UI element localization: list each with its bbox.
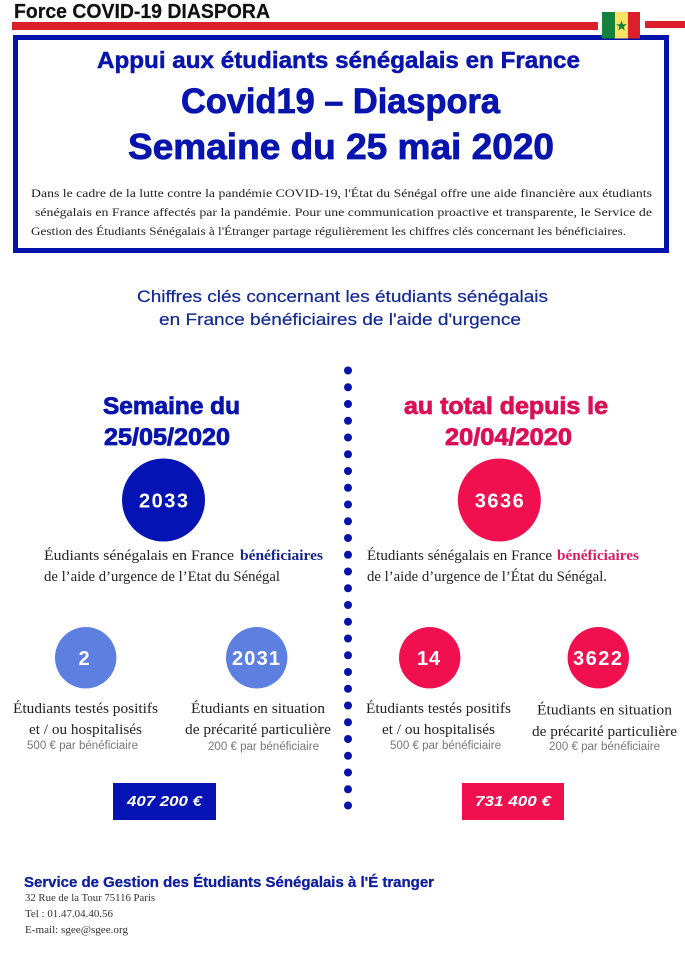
stat: 3622 <box>568 627 629 688</box>
stat: 14 <box>399 627 460 688</box>
label: positive or hospitalised <box>13 700 158 752</box>
stat: 14: 14 <box>417 648 441 670</box>
cumulative heading <box>404 393 608 451</box>
intro paragraph: Dans le cadre de la lutte contre la pandémie COVID-19, l'État du Sénégal offre une aide financière aux étudiants <box>31 186 653 200</box>
total box: 407 200 € <box>113 783 216 820</box>
total box: 407 200 €: 407 200 € <box>126 793 203 810</box>
label: precarious situation <box>532 702 677 753</box>
big stat: 3636 <box>458 458 541 542</box>
label: positive or hospitalised: et / ou hospitalisés <box>382 722 495 738</box>
total box: 731 400 € <box>462 783 564 820</box>
label: precarious situation <box>185 700 331 753</box>
header title: Force COVID-19 DIASPORA <box>14 1 270 23</box>
label: positive or hospitalised: Étudiants testés positifs <box>13 700 158 717</box>
beneficiaries description <box>367 547 639 585</box>
dotted vertical divider <box>344 366 352 810</box>
panel: week column <box>13 393 331 820</box>
icon: Senegal flag <box>602 12 640 38</box>
week heading: Semaine du <box>103 393 240 420</box>
title line 2: Covid19 – Diaspora <box>181 82 501 121</box>
label: precarious situation: 200 € par bénéficiaire <box>208 741 319 753</box>
stat: 2 <box>55 627 116 688</box>
header red bar <box>12 21 685 30</box>
footer address: E-mail: sgee@sgee.org <box>25 925 129 936</box>
label: positive or hospitalised: Étudiants testés positifs <box>366 700 511 717</box>
stat: 2031 <box>226 627 287 688</box>
big stat: 3636: 3636 <box>475 490 524 512</box>
week heading <box>103 393 240 451</box>
footer address <box>25 893 155 936</box>
footer contact block <box>24 874 434 936</box>
cumulative heading: au total depuis le <box>404 393 608 420</box>
stat: 3622: 3622 <box>573 648 622 670</box>
section heading: en France bénéficiaires de l'aide d'urgence <box>159 311 521 329</box>
beneficiaries description: de l’aide d’urgence de l’État du Sénégal. <box>367 568 607 585</box>
beneficiaries description <box>44 547 323 585</box>
label: positive or hospitalised: et / ou hospitalisés <box>29 722 142 738</box>
label: positive or hospitalised <box>366 700 511 752</box>
beneficiaries description: Éudiants sénégalais en France <box>44 547 234 564</box>
beneficiaries description: Étudiants sénégalais en France <box>367 547 552 564</box>
footer address: Tel : 01.47.04.40.56 <box>25 909 113 920</box>
section heading: Chiffres clés concernant les étudiants sénégalais <box>137 288 548 306</box>
footer heading: Service de Gestion des Étudiants Sénégalais à l'É tranger <box>24 874 434 891</box>
intro paragraph: Gestion des Étudiants Sénégalais à l'Étranger partage régulièrement les chiffres clés concernant les bénéficiaires. <box>31 224 626 238</box>
beneficiaries description: de l’aide d’urgence de l’Etat du Sénégal <box>44 569 280 585</box>
label: precarious situation: Étudiants en situation <box>191 700 326 717</box>
label: precarious situation: de précarité particulière <box>532 724 677 740</box>
big stat: 2033: 2033 <box>139 490 188 512</box>
label: precarious situation: Étudiants en situation <box>537 702 673 718</box>
label: positive or hospitalised: 500 € par bénéficiaire <box>27 740 138 752</box>
total box: 731 400 €: 731 400 € <box>475 793 552 810</box>
panel: introduction frame <box>16 38 666 250</box>
label: precarious situation: de précarité particulière <box>185 722 331 738</box>
title line 1: Appui aux étudiants sénégalais en France <box>97 47 580 73</box>
intro paragraph: sénégalais en France affectés par la pandémie. Pour une communication proactive et transparente, le Service de <box>35 207 652 219</box>
stat: 2031: 2031 <box>232 648 280 670</box>
beneficiaries description: bénéficiaires <box>557 548 639 564</box>
label: positive or hospitalised: 500 € par bénéficiaire <box>390 740 501 752</box>
cumulative heading: 20/04/2020 <box>445 424 572 451</box>
stat: 2: 2 <box>78 648 90 670</box>
section heading <box>137 288 548 329</box>
footer address: 32 Rue de la Tour 75116 Paris <box>25 893 155 904</box>
panel: cumulative column <box>366 393 677 820</box>
big stat: 2033 <box>122 458 205 542</box>
intro paragraph <box>31 186 653 238</box>
title line 3: Semaine du 25 mai 2020 <box>128 126 554 167</box>
label: precarious situation: 200 € par bénéficiaire <box>549 741 660 753</box>
week heading: 25/05/2020 <box>104 424 230 451</box>
beneficiaries description: bénéficiaires <box>240 548 323 564</box>
